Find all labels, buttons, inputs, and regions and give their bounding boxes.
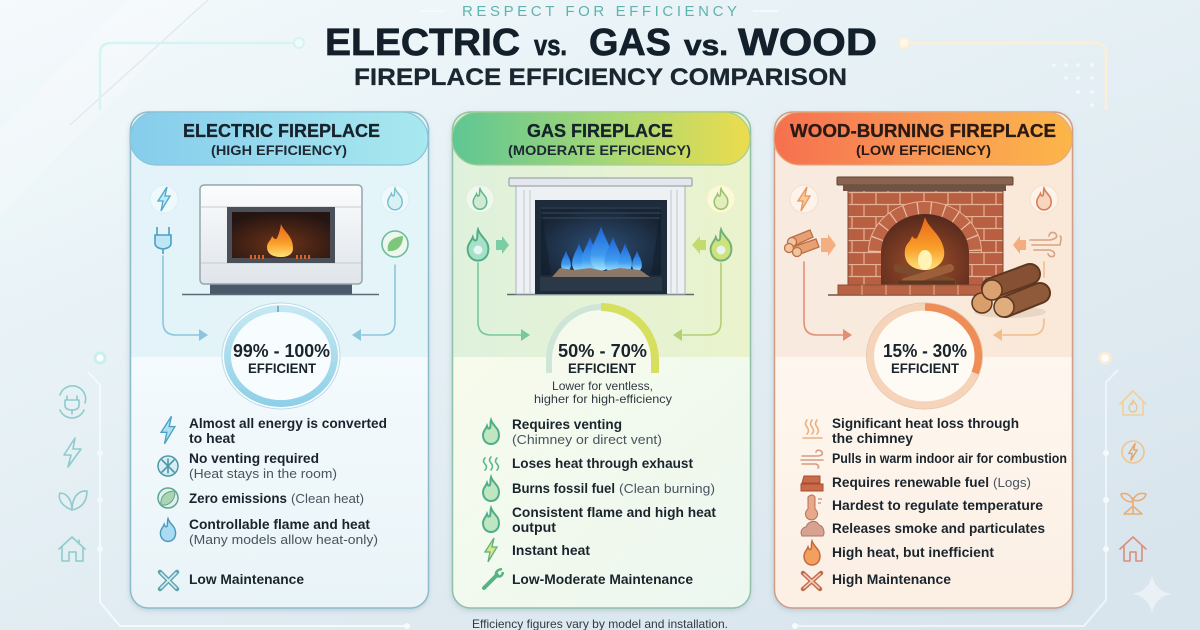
- panel: electric fireplace: [130, 112, 428, 608]
- gauge: wood 15-30%: [866, 303, 982, 409]
- gauge: gas 50-70%: [534, 307, 672, 406]
- header: wood: WOOD-BURNING FIREPLACE: [790, 121, 1056, 141]
- gauge: electric 99-100%: [222, 303, 340, 409]
- feature list: gas: Consistent flame and high heat: [512, 505, 717, 520]
- feature list: gas: Burns fossil fuel: [512, 481, 615, 496]
- feature list: electric: (Clean heat): [291, 491, 364, 506]
- gauge: gas 50-70%: Lower for ventless,: [552, 379, 653, 393]
- feature list: electric: Almost all energy is converted: [189, 416, 387, 431]
- header: gas: [452, 112, 750, 165]
- panel: wood-burning fireplace: [774, 112, 1072, 608]
- feature list: wood: High Maintenance: [832, 572, 952, 587]
- header: electric: [130, 112, 428, 165]
- feature list: gas: Requires venting: [512, 417, 622, 432]
- feature list: wood: High heat, but inefficient: [832, 545, 995, 560]
- feature list: electric: (Heat stays in the room): [189, 466, 337, 481]
- side icons: left column: [59, 386, 87, 561]
- feature list: electric: Low Maintenance: [189, 572, 305, 587]
- feature list: wood: [801, 416, 1067, 589]
- header: wood: (LOW EFFICIENCY): [856, 142, 991, 158]
- gauge: electric 99-100%: EFFICIENT: [248, 360, 316, 376]
- feature list: electric: to heat: [189, 431, 236, 446]
- title: [325, 22, 877, 64]
- title: ELECTRIC: [325, 22, 520, 64]
- gauge: electric 99-100%: 99% - 100%: [233, 341, 330, 361]
- gauge: wood 15-30%: EFFICIENT: [891, 360, 959, 376]
- illustration: electric fireplace: [182, 185, 379, 294]
- title: vs.: [684, 30, 728, 62]
- feature list: wood: Hardest to regulate temperature: [832, 498, 1044, 513]
- feature list: electric: Zero emissions: [189, 491, 287, 506]
- side icons: right column: [1120, 391, 1146, 561]
- header: wood: [774, 112, 1072, 165]
- feature list: electric: No venting required: [189, 451, 319, 466]
- feature list: gas: (Chimney or direct vent): [512, 432, 662, 447]
- feature list: electric: (Many models allow heat-only): [189, 532, 378, 547]
- feature list: wood: Releases smoke and particulates: [832, 521, 1045, 536]
- gauge: gas 50-70%: 50% - 70%: [558, 341, 647, 361]
- feature list: electric: [158, 416, 387, 589]
- feature list: electric: Controllable flame and heat: [189, 517, 371, 532]
- feature list: gas: (Clean burning): [619, 481, 715, 496]
- icons and arrows: electric: [150, 185, 409, 341]
- feature list: wood: the chimney: [832, 431, 913, 446]
- header: gas: (MODERATE EFFICIENCY): [508, 142, 691, 158]
- kicker text: RESPECT FOR EFFICIENCY: [462, 3, 737, 20]
- illustration: gas fireplace: [507, 178, 694, 294]
- feature list: wood: Requires renewable fuel: [832, 475, 989, 490]
- icons and arrows: gas: [466, 185, 735, 341]
- feature list: gas: Low-Moderate Maintenance: [512, 572, 693, 587]
- feature list: gas: Instant heat: [512, 543, 591, 558]
- panel: gas fireplace: [452, 112, 750, 608]
- feature list: wood: (Logs): [993, 475, 1031, 490]
- feature list: wood: Significant heat loss through: [832, 416, 1019, 431]
- feature list: gas: output: [512, 520, 557, 535]
- gauge: gas 50-70%: EFFICIENT: [568, 360, 636, 376]
- feature list: gas: Loses heat through exhaust: [512, 456, 694, 471]
- gauge: wood 15-30%: 15% - 30%: [883, 341, 967, 361]
- illustration: brick fireplace and logs: [828, 177, 1046, 318]
- subtitle: FIREPLACE EFFICIENCY COMPARISON: [354, 64, 847, 91]
- title: GAS: [589, 22, 671, 64]
- feature list: gas: [483, 417, 717, 588]
- gauge: gas 50-70%: higher for high-efficiency: [534, 392, 672, 406]
- header: electric: (HIGH EFFICIENCY): [211, 142, 347, 158]
- header: electric: ELECTRIC FIREPLACE: [183, 121, 380, 141]
- title: vs.: [534, 30, 567, 62]
- header: gas: GAS FIREPLACE: [527, 121, 673, 141]
- icons and arrows: wood: [784, 185, 1061, 341]
- feature list: wood: Pulls in warm indoor air for combustion: [832, 451, 1067, 466]
- title: WOOD: [738, 22, 877, 64]
